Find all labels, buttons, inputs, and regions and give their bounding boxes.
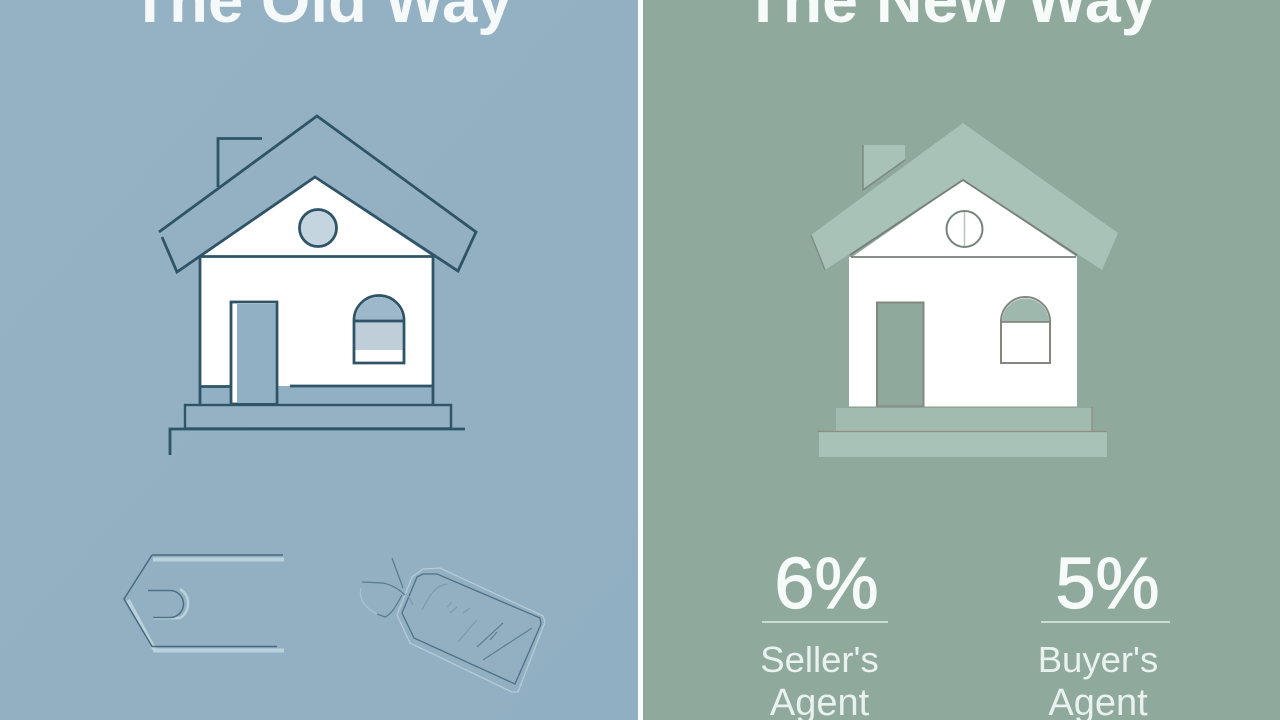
- stat: buyer's agent: [1038, 544, 1170, 720]
- icon: outlined house: [159, 116, 476, 455]
- stat: buyer's agent: Buyer's: [1038, 639, 1158, 680]
- stat: seller's agent: [760, 544, 888, 720]
- panel: new way: [643, 0, 1280, 720]
- stat: buyer's agent: 5%: [1055, 544, 1160, 624]
- stat: seller's agent: 6%: [774, 544, 879, 624]
- icon: flat house: [811, 123, 1118, 457]
- stat: seller's agent: Seller's: [760, 639, 879, 680]
- panel: old way: [0, 0, 638, 720]
- icon: price tag left: [124, 555, 284, 650]
- icon: price tag right: [360, 558, 545, 692]
